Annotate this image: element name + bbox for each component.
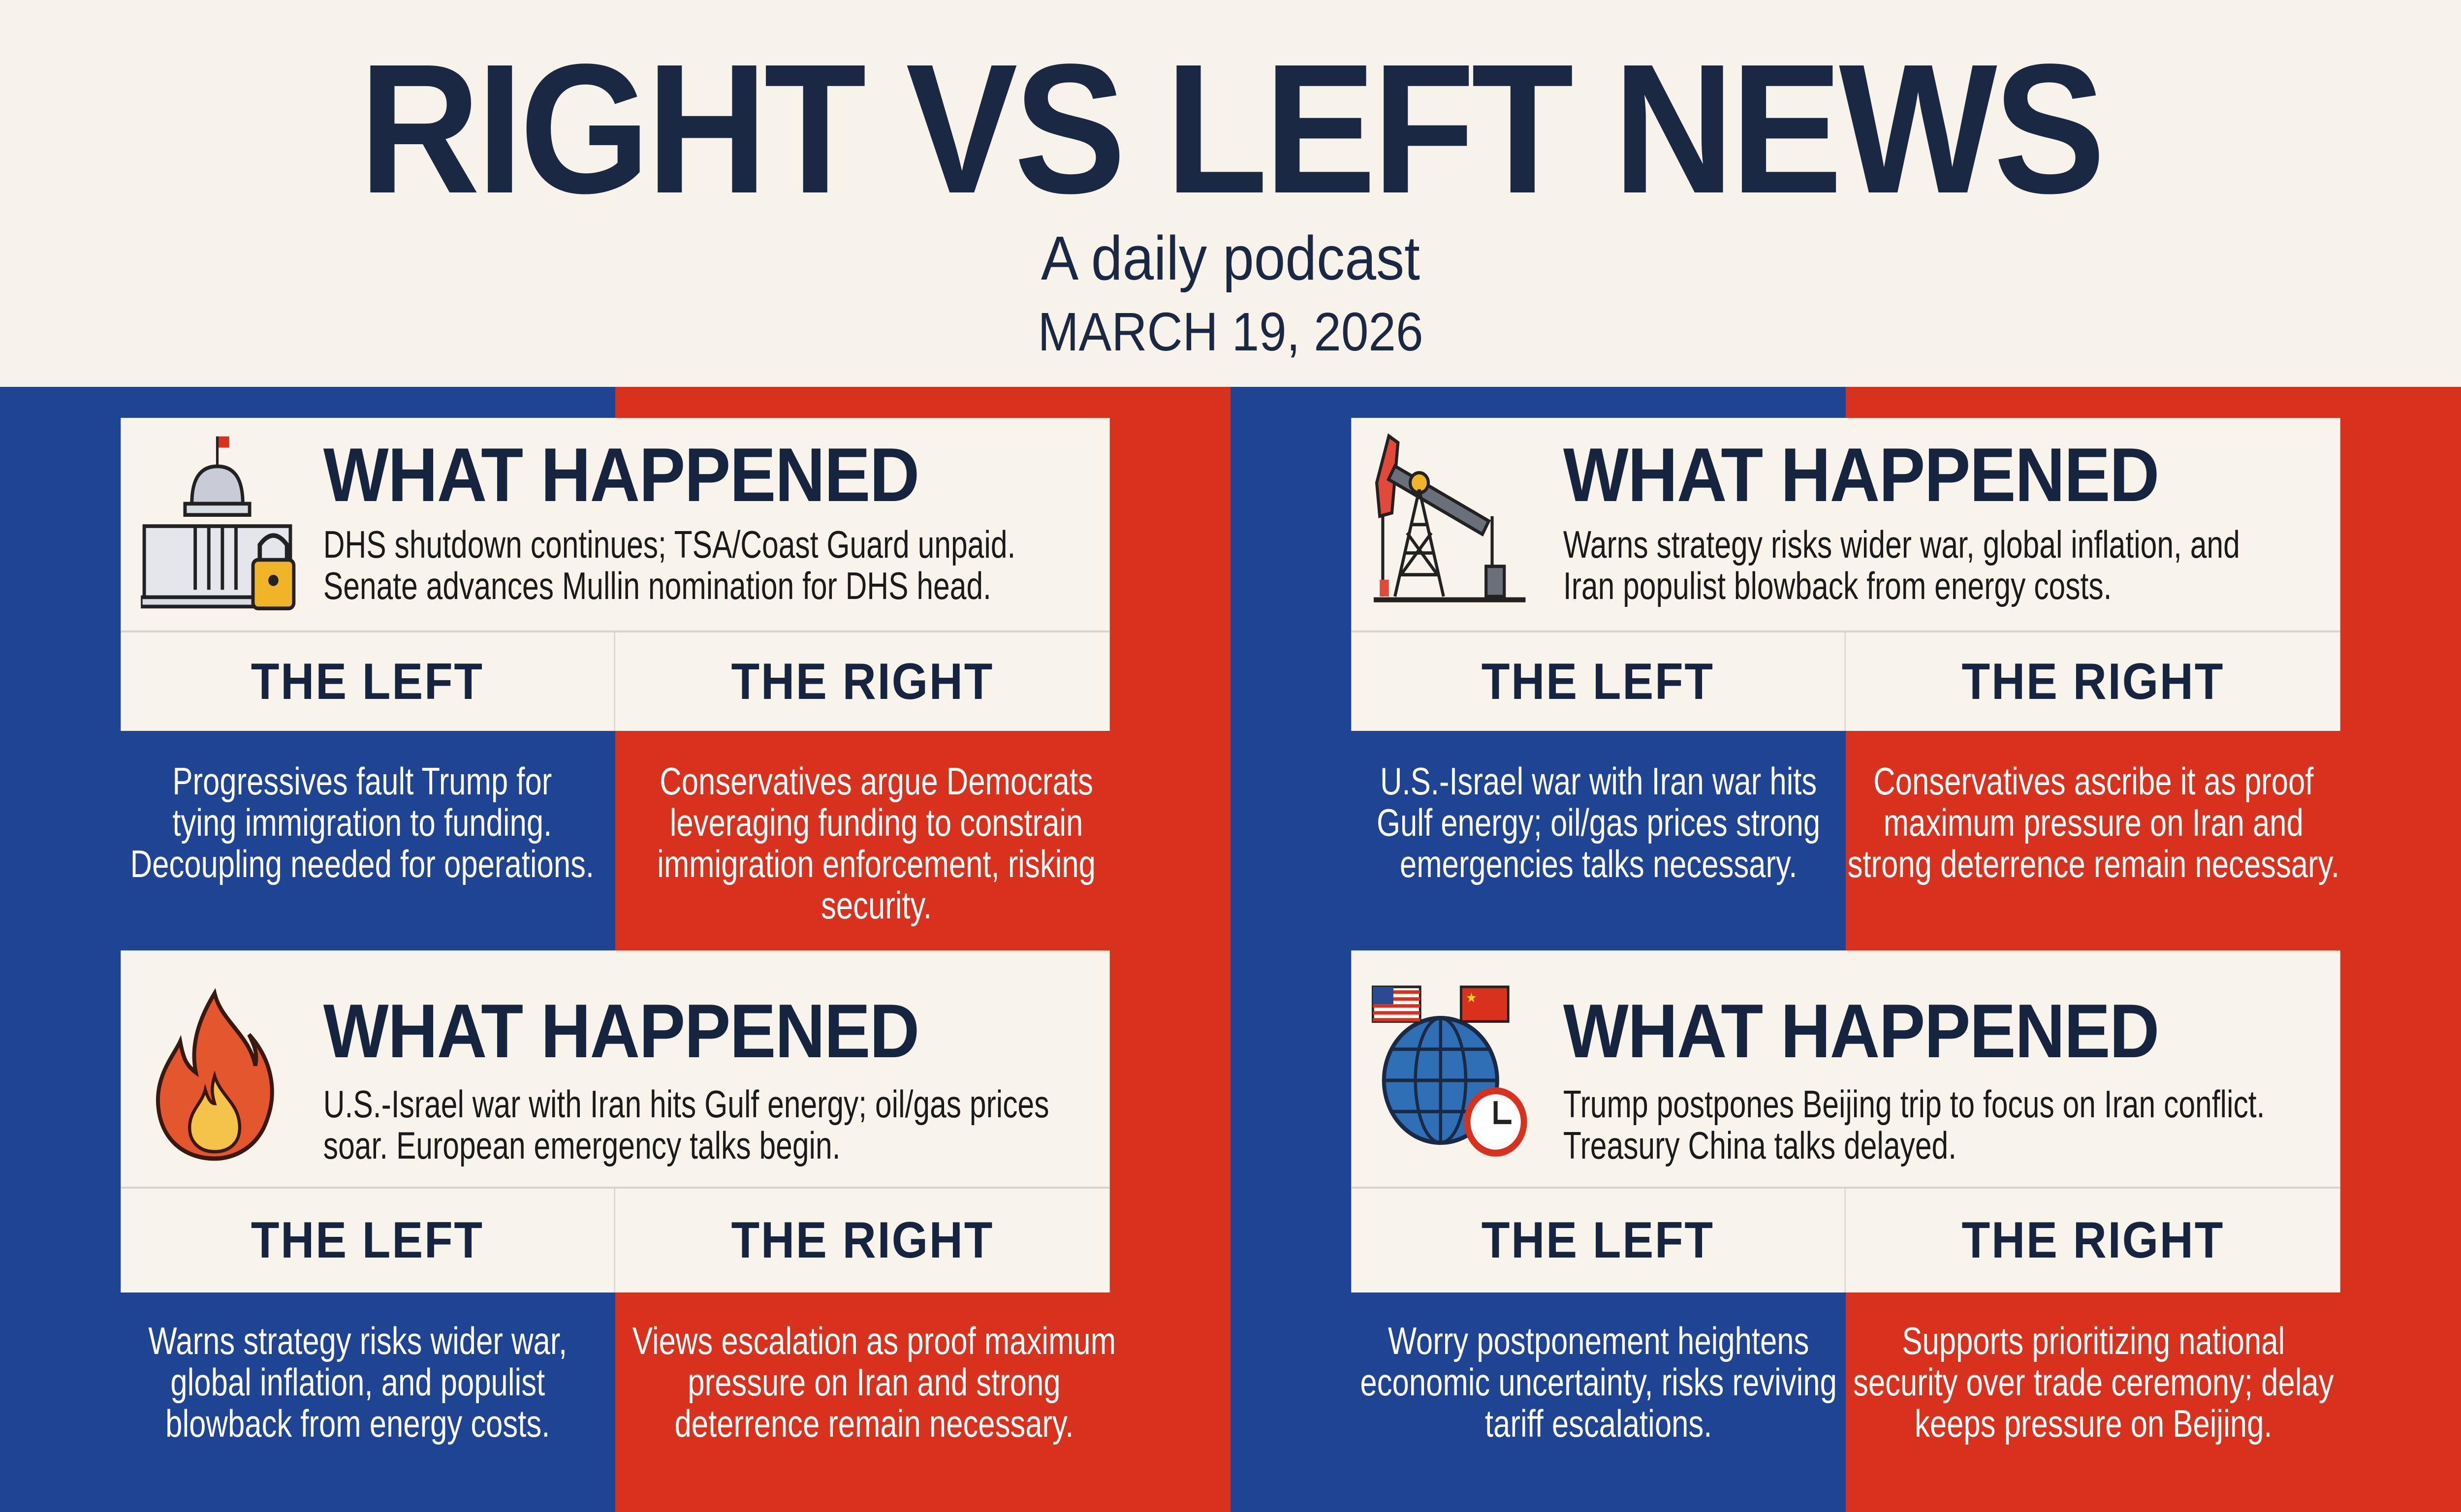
card top [1351,418,2340,632]
description: Trump postpones Beijing trip to focus on Iran conflict. [1563,1082,2265,1126]
right text [657,759,1096,927]
left text: global inflation, and populist [170,1360,545,1404]
title: RIGHT VS LEFT NEWS [359,26,2102,232]
right text: keeps pressure on Beijing. [1915,1402,2272,1445]
icon: globe with flags and clock [1369,980,1544,1167]
header background [0,0,2461,387]
left header [1351,632,1846,731]
description [323,523,1015,607]
left header [121,632,615,731]
left text: U.S.-Israel war with Iran war hits [1380,759,1817,803]
right text: pressure on Iran and strong [688,1360,1061,1404]
right header: THE RIGHT [731,653,994,710]
right header [1846,1189,2340,1292]
left text: Worry postponement heightens [1388,1319,1809,1362]
description [1563,523,2240,607]
left header: THE LEFT [1482,1212,1714,1269]
right text: leveraging funding to constrain [670,801,1083,844]
description: Treasury China talks delayed. [1563,1124,1956,1167]
icon: oil pump [1373,433,1526,602]
left text: Decoupling needed for operations. [130,842,594,885]
left text [1377,759,1820,885]
right text: immigration enforcement, risking [657,842,1096,885]
heading: WHAT HAPPENED [323,432,919,517]
left text [148,1319,567,1445]
panel: DHS shutdown [121,418,1110,927]
description: Warns strategy risks wider war, global inflation, and [1563,523,2240,566]
left text: blowback from energy costs. [165,1402,550,1445]
right text [1848,759,2339,885]
left text: economic uncertainty, risks reviving [1360,1360,1837,1404]
left text: Warns strategy risks wider war, [148,1319,567,1362]
right text [632,1319,1116,1445]
right header: THE RIGHT [1962,1212,2224,1269]
description: Iran populist blowback from energy costs. [1563,564,2112,607]
right text: Views escalation as proof maximum [632,1319,1116,1362]
right header [615,632,1110,731]
heading: WHAT HAPPENED [323,988,919,1073]
right header: THE RIGHT [731,1212,994,1269]
right text: security over trade ceremony; delay [1853,1360,2334,1404]
right text [1763,1320,2424,1444]
description: Senate advances Mullin nomination for DHS head. [323,564,991,607]
description: U.S.-Israel war with Iran hits Gulf energy; oil/gas prices [323,1082,1049,1126]
left text: Progressives fault Trump for [172,759,552,803]
card top [1351,950,2340,1189]
left text: tying immigration to funding. [172,801,552,844]
left text [1268,1320,1929,1444]
heading: WHAT HAPPENED [1563,988,2159,1073]
description [323,1082,1049,1167]
panel: Beijing trip [1351,950,2340,1445]
left text: tariff escalations. [1485,1402,1712,1445]
description [1563,1083,2265,1166]
icon: capitol with lock [141,436,295,610]
left text: Gulf energy; oil/gas prices strong [1377,801,1820,844]
icon: globe with flags and clock: ★ [1466,990,1477,1006]
heading: WHAT HAPPENED [1563,432,2159,517]
right header [615,1189,1110,1292]
date: MARCH 19, 2026 [1038,302,1423,362]
right text: Supports prioritizing national [1902,1319,2285,1362]
right text: deterrence remain necessary. [675,1402,1073,1445]
subtitle: A daily podcast [1041,223,1420,293]
right text: security. [821,883,932,927]
card top [121,950,1110,1189]
right header [1846,632,2340,731]
description: DHS shutdown continues; TSA/Coast Guard unpaid. [323,523,1015,566]
left header: THE LEFT [1482,653,1714,710]
right text: Conservatives argue Democrats [660,759,1093,803]
right text: maximum pressure on Iran and [1884,801,2303,844]
left text: emergencies talks necessary. [1400,842,1797,885]
right text: Conservatives ascribe it as proof [1873,759,2313,803]
background stripes [0,387,615,1512]
left header [121,1189,615,1292]
left header: THE LEFT [251,1212,484,1269]
left header [1351,1189,1846,1292]
panel: energy war [121,950,1116,1445]
left text [130,759,594,885]
left header: THE LEFT [251,653,484,710]
card top [121,418,1110,632]
panel: oil [1351,418,2340,885]
description: soar. European emergency talks begin. [323,1124,841,1167]
right text: strong deterrence remain necessary. [1848,842,2339,885]
right header: THE RIGHT [1962,653,2224,710]
icon: flame [156,988,274,1161]
